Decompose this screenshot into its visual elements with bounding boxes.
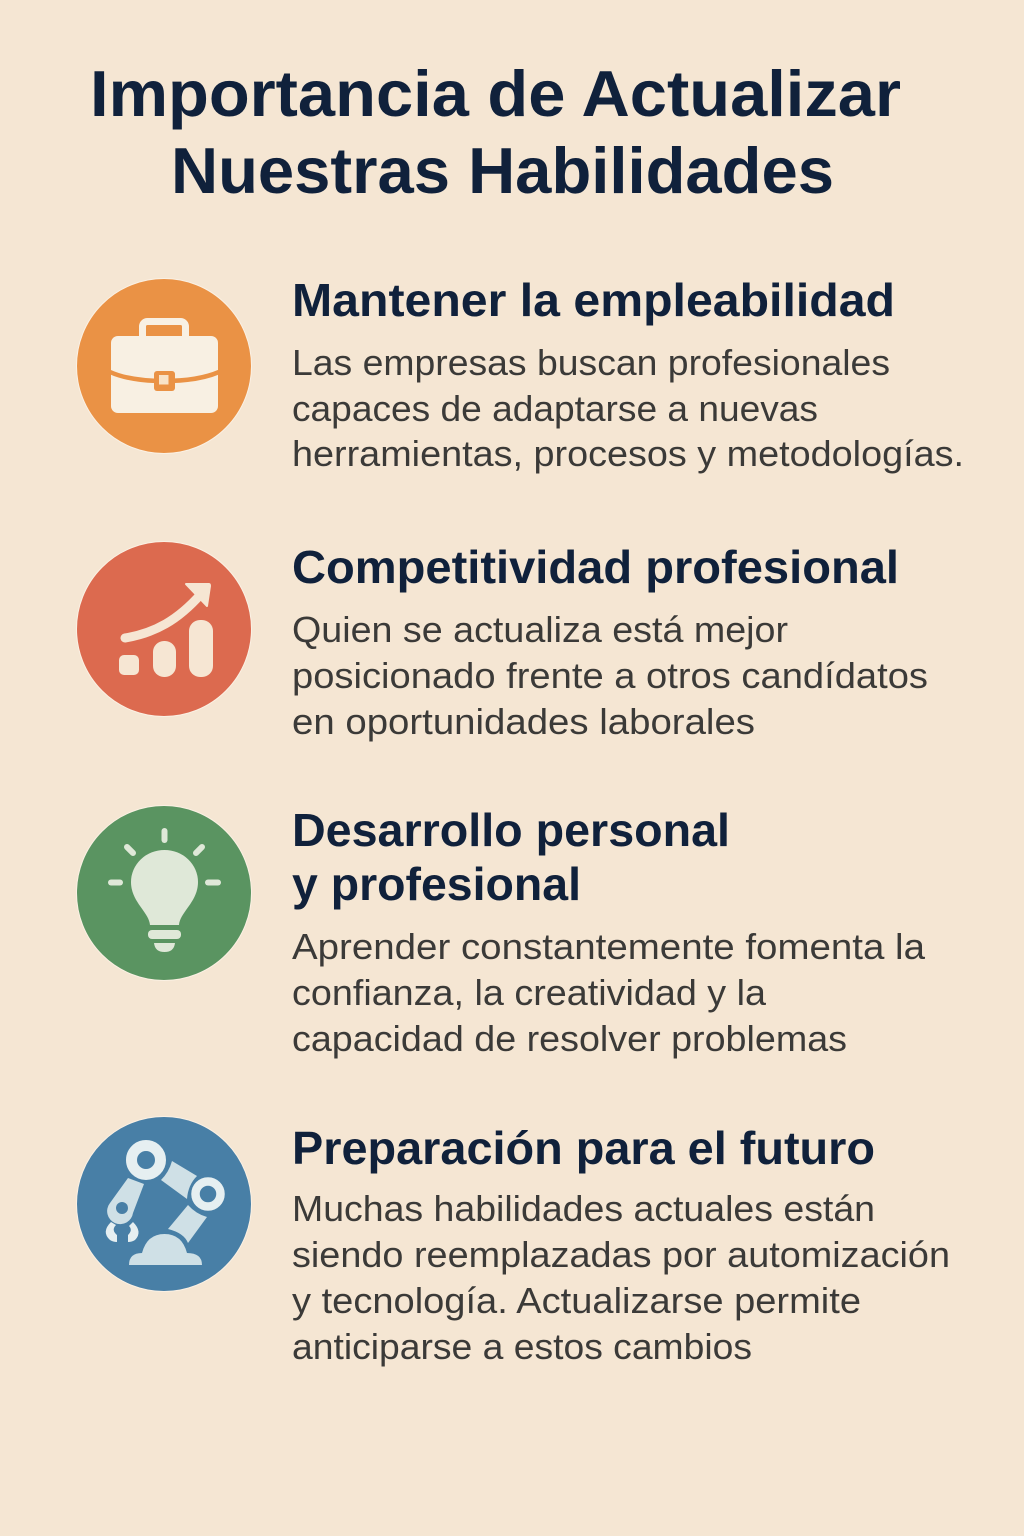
text block: Quien se actualiza está mejor <box>292 609 788 650</box>
text block: posicionado frente a otros candídatos <box>292 655 928 696</box>
text block: capaces de adaptarse a nuevas <box>292 388 818 429</box>
icon: light bulb <box>76 806 252 980</box>
panel: competitividad profesional <box>76 541 928 742</box>
icon: briefcase <box>76 278 252 454</box>
heading: Preparación para el futuro <box>292 1122 875 1174</box>
text block <box>292 609 928 742</box>
text block: Muchas habilidades actuales están <box>292 1188 875 1229</box>
text block: Aprender constantemente fomenta la <box>292 926 926 967</box>
text block <box>292 342 964 474</box>
text block: anticiparse a estos cambios <box>292 1326 752 1367</box>
text block: en oportunidades laborales <box>292 701 755 742</box>
icon: growth chart <box>76 542 252 716</box>
icon: robotic arm <box>76 1116 252 1292</box>
title: Nuestras Habilidades <box>171 134 834 207</box>
text block: y tecnología. Actualizarse permite <box>292 1280 861 1321</box>
panel: preparación para el futuro <box>76 1116 950 1367</box>
text block <box>292 1188 950 1367</box>
title: Importancia de Actualizar <box>90 57 901 130</box>
heading: Competitividad profesional <box>292 541 899 593</box>
text block <box>292 926 926 1059</box>
text block: confianza, la creatividad y la <box>292 972 767 1013</box>
title <box>90 57 901 207</box>
text block: Las empresas buscan profesionales <box>292 342 890 383</box>
heading: y profesional <box>292 858 581 910</box>
heading <box>292 804 730 910</box>
text block: capacidad de resolver problemas <box>292 1018 847 1059</box>
text block: siendo reemplazadas por automización <box>292 1234 950 1275</box>
text block: herramientas, procesos y metodologías. <box>292 433 964 474</box>
panel: desarrollo personal y profesional <box>76 804 926 1059</box>
panel: mantener la empleabilidad <box>76 274 964 474</box>
heading: Mantener la empleabilidad <box>292 274 895 326</box>
heading: Desarrollo personal <box>292 804 730 856</box>
